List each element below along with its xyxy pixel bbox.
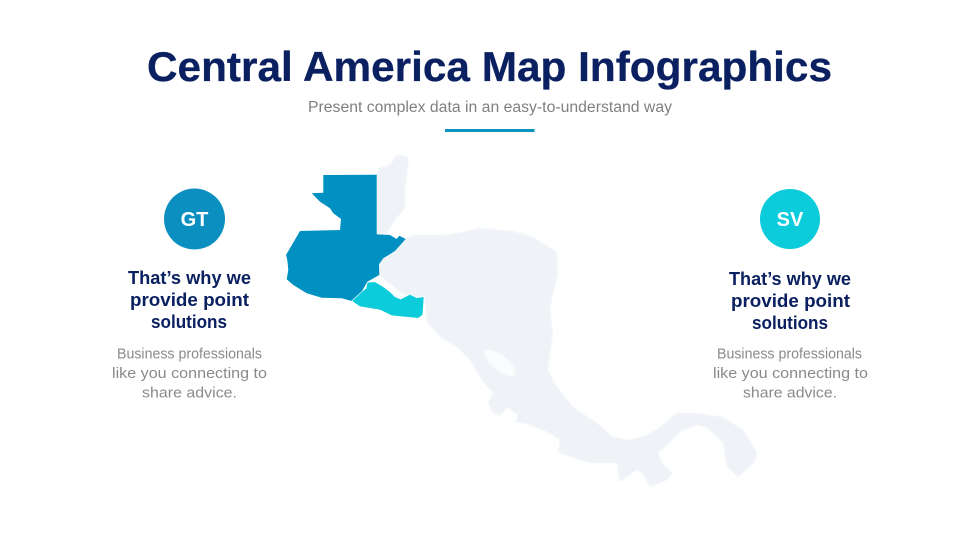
panel: El Salvador: [713, 189, 868, 402]
text block: SV: like you connecting to: [713, 365, 868, 382]
heading: GT: provide point: [130, 290, 249, 310]
heading: SV: That’s why we: [729, 269, 851, 289]
badge: GT: GT: [181, 209, 208, 231]
text block: SV: Business professionals: [717, 346, 862, 362]
text block: GT: like you connecting to: [112, 365, 267, 382]
title: Central America Map Infographics: [147, 43, 832, 90]
heading: GT: solutions: [151, 312, 227, 332]
badge: GT: [164, 188, 225, 250]
badge: SV: [760, 189, 820, 249]
map region: El Salvador: [352, 282, 424, 318]
panel: Guatemala: [112, 188, 267, 402]
title underline: [445, 129, 534, 132]
map region: Honduras, Nicaragua, Costa Rica, Panama: [379, 228, 757, 487]
heading: SV: [729, 269, 851, 333]
subtitle: Present complex data in an easy-to-understand way: [308, 99, 672, 116]
heading: GT: That’s why we: [128, 268, 251, 288]
text block: GT: [112, 346, 267, 402]
heading: SV: solutions: [752, 313, 828, 333]
badge: SV: SV: [777, 209, 804, 231]
heading: GT: [128, 268, 251, 332]
text block: SV: share advice.: [743, 384, 837, 402]
text block: GT: share advice.: [142, 384, 237, 402]
map region: Guatemala: [286, 175, 406, 301]
map lake: Nicaragua: [480, 345, 520, 381]
text block: GT: Business professionals: [117, 346, 262, 362]
heading: SV: provide point: [731, 291, 850, 311]
map region: Belize: [377, 155, 408, 234]
text block: SV: [713, 346, 868, 402]
map: Central America: [286, 155, 757, 487]
